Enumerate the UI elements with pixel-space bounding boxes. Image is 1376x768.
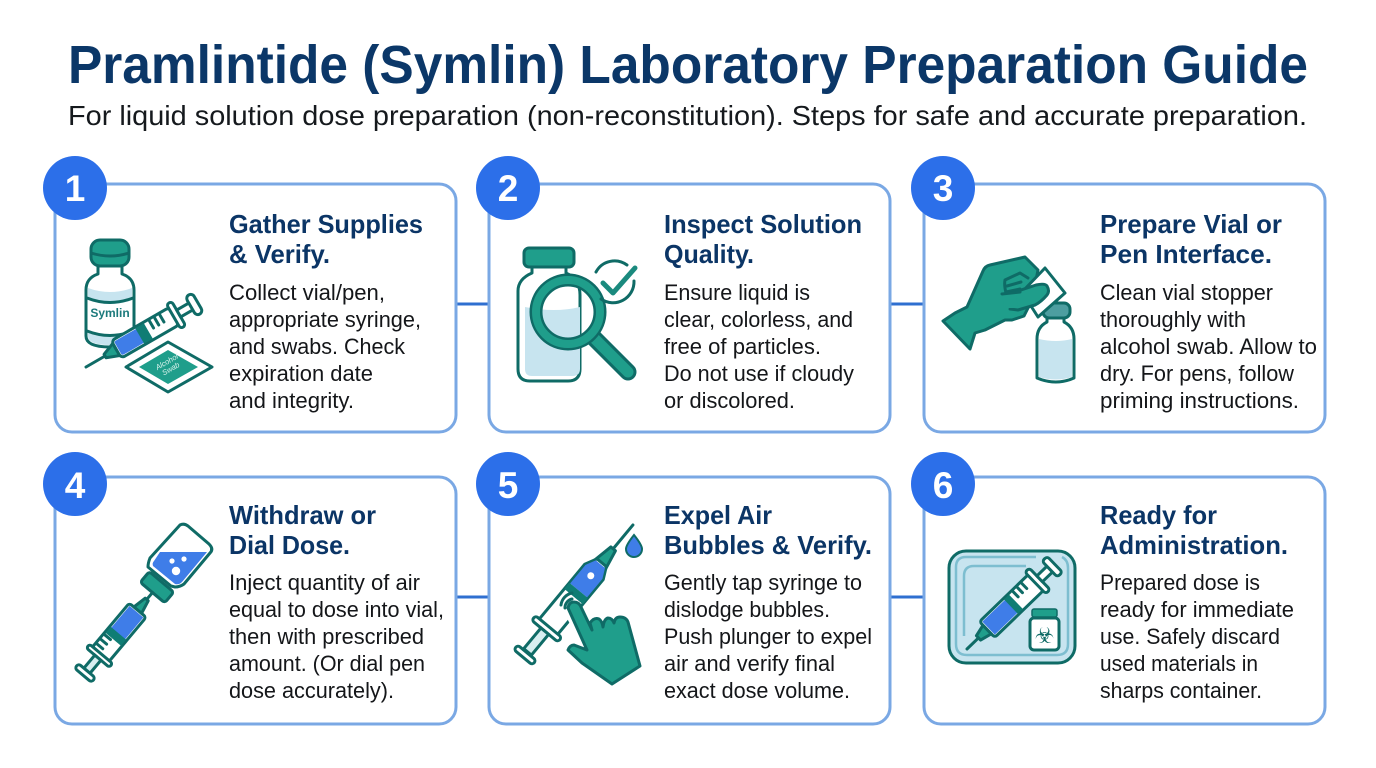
heading: Withdraw or	[229, 500, 376, 530]
step number 1: 1	[65, 168, 85, 209]
heading: Gather Supplies	[229, 209, 423, 239]
text block: Gently tap syringe to	[664, 570, 862, 595]
text block: expiration date	[229, 361, 373, 386]
icon: vial, syringe and alcohol swab: Alcohol	[154, 352, 180, 372]
text block	[1100, 280, 1317, 413]
icon: syringe drawing from inverted vial	[71, 524, 212, 686]
step number 1	[43, 156, 107, 220]
icon: vial, syringe and alcohol swab	[79, 240, 212, 392]
step number 5: 5	[498, 465, 518, 506]
text block: Collect vial/pen,	[229, 280, 385, 305]
subtitle: For liquid solution dose preparation (non-reconstitution). Steps for safe and accurate preparation.	[68, 100, 1307, 131]
icon: vial, syringe and alcohol swab: Swab	[160, 360, 181, 377]
panel: step 3	[911, 156, 1325, 432]
text block: Clean vial stopper	[1100, 280, 1273, 305]
text block: Push plunger to expel	[664, 624, 872, 649]
text block: or discolored.	[664, 388, 795, 413]
heading: Pen Interface.	[1100, 239, 1272, 269]
heading: Ready for	[1100, 500, 1217, 530]
text block: clear, colorless, and	[664, 307, 853, 332]
text block: Do not use if cloudy	[664, 361, 854, 386]
text block: amount. (Or dial pen	[229, 651, 425, 676]
heading: Prepare Vial or	[1100, 209, 1282, 239]
text block: alcohol swab. Allow to	[1100, 334, 1317, 359]
step number 4: 4	[65, 465, 86, 506]
text block: then with prescribed	[229, 624, 424, 649]
text block: and swabs. Check	[229, 334, 406, 359]
icon: bottle under magnifier with check	[518, 248, 635, 381]
text block: air and verify final	[664, 651, 835, 676]
icon: finger tapping syringe with drop	[510, 514, 646, 684]
panel: step 4	[43, 452, 456, 724]
text block: free of particles.	[664, 334, 821, 359]
heading	[1100, 500, 1288, 560]
heading: Expel Air	[664, 500, 772, 530]
text block: ready for immediate	[1100, 597, 1294, 622]
title: Pramlintide (Symlin) Laboratory Preparation Guide	[68, 35, 1308, 95]
text block: sharps container.	[1100, 678, 1262, 703]
icon: vial, syringe and alcohol swab: Symlin	[90, 306, 130, 320]
text block: dose accurately).	[229, 678, 394, 703]
step number 6	[911, 452, 975, 516]
panel: step 6	[911, 452, 1325, 724]
text block: appropriate syringe,	[229, 307, 421, 332]
text block: Prepared dose is	[1100, 570, 1260, 595]
step number 3: 3	[933, 168, 953, 209]
text block: dry. For pens, follow	[1100, 361, 1294, 386]
step number 2	[476, 156, 540, 220]
heading: Bubbles & Verify.	[664, 530, 872, 560]
text block: Inject quantity of air	[229, 570, 420, 595]
panel: step 2	[476, 156, 890, 432]
heading	[664, 209, 862, 269]
text block	[229, 280, 421, 413]
heading	[664, 500, 872, 560]
heading	[229, 209, 423, 269]
text block	[664, 570, 872, 703]
step number 5	[476, 452, 540, 516]
step number 3	[911, 156, 975, 220]
icon: syringe and biohazard vial in tray: ☣	[1035, 624, 1054, 649]
text block: used materials in	[1100, 651, 1258, 676]
panel: step 5	[476, 452, 890, 724]
heading	[229, 500, 376, 560]
heading: Administration.	[1100, 530, 1288, 560]
heading: Inspect Solution	[664, 209, 862, 239]
heading: & Verify.	[229, 239, 330, 269]
text block: and integrity.	[229, 388, 354, 413]
heading: Dial Dose.	[229, 530, 350, 560]
icon: gloved hand swabbing vial	[943, 257, 1074, 382]
heading	[1100, 209, 1282, 269]
text block: exact dose volume.	[664, 678, 850, 703]
text block: dislodge bubbles.	[664, 597, 830, 622]
text block: thoroughly with	[1100, 307, 1246, 332]
step number 6: 6	[933, 465, 953, 506]
icon: syringe and biohazard vial in tray	[949, 551, 1075, 663]
panel: step 1	[43, 156, 456, 432]
text block: Ensure liquid is	[664, 280, 810, 305]
heading: Quality.	[664, 239, 754, 269]
text block: equal to dose into vial,	[229, 597, 444, 622]
text block	[1100, 570, 1294, 703]
text block	[664, 280, 854, 413]
step number 2: 2	[498, 168, 518, 209]
text block: use. Safely discard	[1100, 624, 1280, 649]
text block: priming instructions.	[1100, 388, 1299, 413]
step number 4	[43, 452, 107, 516]
text block	[229, 570, 444, 703]
